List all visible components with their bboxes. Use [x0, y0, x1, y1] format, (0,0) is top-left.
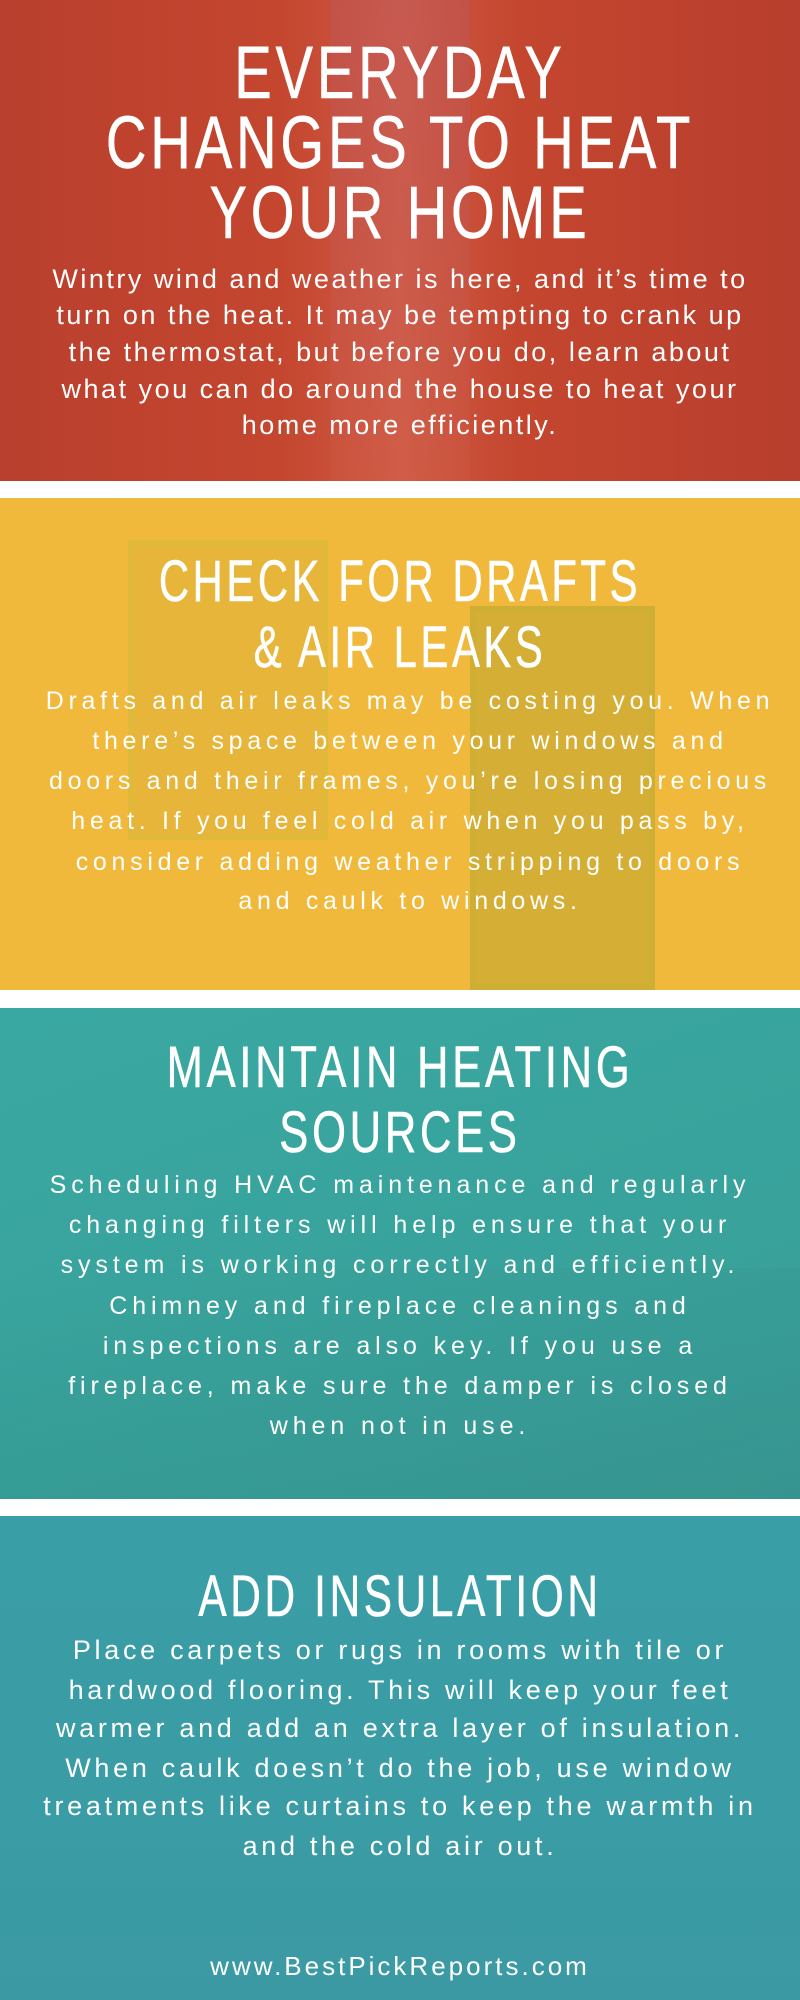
heading: maintain heating sources: SOURCES	[279, 1100, 521, 1165]
text block: intro: Wintry wind and weather is here, and it’s time to	[52, 264, 748, 294]
heading: add insulation: ADD INSULATION	[198, 1564, 602, 1629]
text block: insulation: Place carpets or rugs in rooms with tile or	[73, 1635, 727, 1665]
text block: insulation: warmer and add an extra layer of insulation.	[56, 1713, 744, 1743]
text block: drafts: and caulk to windows.	[238, 887, 582, 915]
text block: heating: inspections are also key. If you use a	[103, 1332, 697, 1360]
text block: heating: system is working correctly and efficiently.	[61, 1251, 739, 1279]
text block: insulation: When caulk doesn’t do the job, use window	[65, 1753, 735, 1783]
text block: insulation	[43, 1635, 757, 1861]
text block: insulation: treatments like curtains to keep the warmth in	[43, 1791, 757, 1821]
text block: heating: changing filters will help ensure that your	[69, 1211, 731, 1239]
heading: check for drafts: CHECK FOR DRAFTS	[159, 549, 641, 614]
text block: drafts: there’s space between your windows and	[92, 727, 728, 755]
text block: drafts: Drafts and air leaks may be costing you. When	[46, 687, 774, 715]
text block: drafts	[46, 687, 774, 915]
panel: drafts	[0, 498, 800, 990]
text block: drafts: doors and their frames, you’re losing precious	[49, 767, 771, 795]
heading: check for drafts	[159, 549, 641, 680]
text block: intro: the thermostat, but before you do, learn about	[69, 337, 731, 367]
title: EVERYDAY	[234, 31, 566, 114]
text block: insulation: hardwood flooring. This will keep your feet	[69, 1675, 731, 1705]
heading: maintain heating sources	[167, 1035, 633, 1165]
text block: drafts: heat. If you feel cold air when you pass by,	[71, 807, 749, 835]
text block: intro: turn on the heat. It may be tempting to crank up	[56, 300, 744, 330]
text block: heating: fireplace, make sure the damper is closed	[68, 1372, 732, 1400]
footer: website: www.BestPickReports.com	[210, 1951, 590, 1981]
text block: heating: Chimney and fireplace cleanings and	[109, 1292, 691, 1320]
title	[106, 31, 694, 254]
panel: intro	[0, 0, 800, 481]
panel: insulation	[0, 1516, 800, 2000]
panel: heating sources	[0, 1008, 800, 1499]
text block: heating: Scheduling HVAC maintenance and regularly	[50, 1171, 750, 1199]
text block: insulation: and the cold air out.	[243, 1831, 557, 1861]
text block: intro	[52, 264, 748, 440]
title: CHANGES TO HEAT	[106, 101, 694, 184]
text block: drafts: consider adding weather stripping to doors	[76, 848, 744, 876]
text block: intro: home more efficiently.	[242, 410, 558, 440]
text block: heating: when not in use.	[270, 1412, 530, 1440]
text block: intro: what you can do around the house to heat your	[62, 374, 738, 404]
title: YOUR HOME	[209, 171, 591, 254]
heading: check for drafts: & AIR LEAKS	[254, 615, 546, 680]
text block: heating	[50, 1171, 750, 1440]
heading: maintain heating sources: MAINTAIN HEATING	[167, 1035, 633, 1100]
